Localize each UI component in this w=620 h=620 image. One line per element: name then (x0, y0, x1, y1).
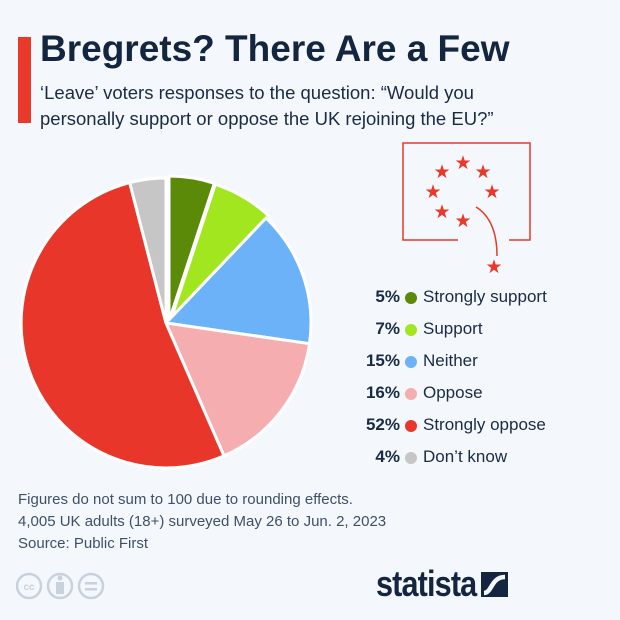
legend row: don't know: 4% (375, 447, 400, 466)
legend row: support: 7% (375, 319, 400, 338)
legend row: strongly oppose: Strongly oppose (423, 415, 546, 434)
icon: license badges (16, 572, 104, 600)
legend row: support: Support (423, 319, 483, 338)
legend row: support (375, 319, 483, 338)
icon: EU flag with departing star: ★ (433, 202, 451, 223)
icon: EU flag with departing star: ★ (483, 182, 501, 203)
legend row: strongly support: Strongly support (423, 287, 547, 306)
legend row: neither: Neither (423, 351, 478, 370)
legend row: neither (366, 351, 478, 370)
title: Bregrets? There Are a Few (40, 28, 510, 69)
pie chart (20, 174, 312, 470)
icon: EU flag with departing star: ★ (485, 257, 503, 278)
footnote (18, 491, 386, 552)
icon: EU flag with departing star: ★ (454, 211, 472, 232)
legend (366, 287, 547, 466)
icon: EU flag with departing star: ★ (424, 182, 442, 203)
legend row: don't know: Don’t know (423, 447, 507, 466)
icon: license badges: cc (23, 582, 35, 593)
legend row: strongly support: 5% (375, 287, 400, 306)
legend row: oppose: Oppose (423, 383, 483, 402)
icon: EU flag with departing star: ★ (474, 162, 492, 183)
legend row: oppose (366, 383, 483, 402)
icon: EU flag with departing star: ★ (454, 153, 472, 174)
legend row: don't know (375, 447, 508, 466)
logo: statista: statista (376, 563, 476, 604)
icon: EU flag with departing star (402, 142, 531, 278)
legend row: neither: 15% (366, 351, 400, 370)
footnote: Figures do not sum to 100 due to rounding effects. (18, 491, 353, 508)
title bar accent (18, 37, 31, 123)
legend row: oppose: 16% (366, 383, 400, 402)
legend row: strongly oppose: 52% (366, 415, 400, 434)
footnote: Source: Public First (18, 535, 148, 552)
legend row: strongly oppose (366, 415, 546, 434)
subtitle: ‘Leave’ voters responses to the question: “Would you personally support or oppose the UK rejoining the EU?” (40, 82, 494, 129)
icon: EU flag with departing star: ★ (433, 162, 451, 183)
footnote: 4,005 UK adults (18+) surveyed May 26 to Jun. 2, 2023 (18, 513, 386, 530)
